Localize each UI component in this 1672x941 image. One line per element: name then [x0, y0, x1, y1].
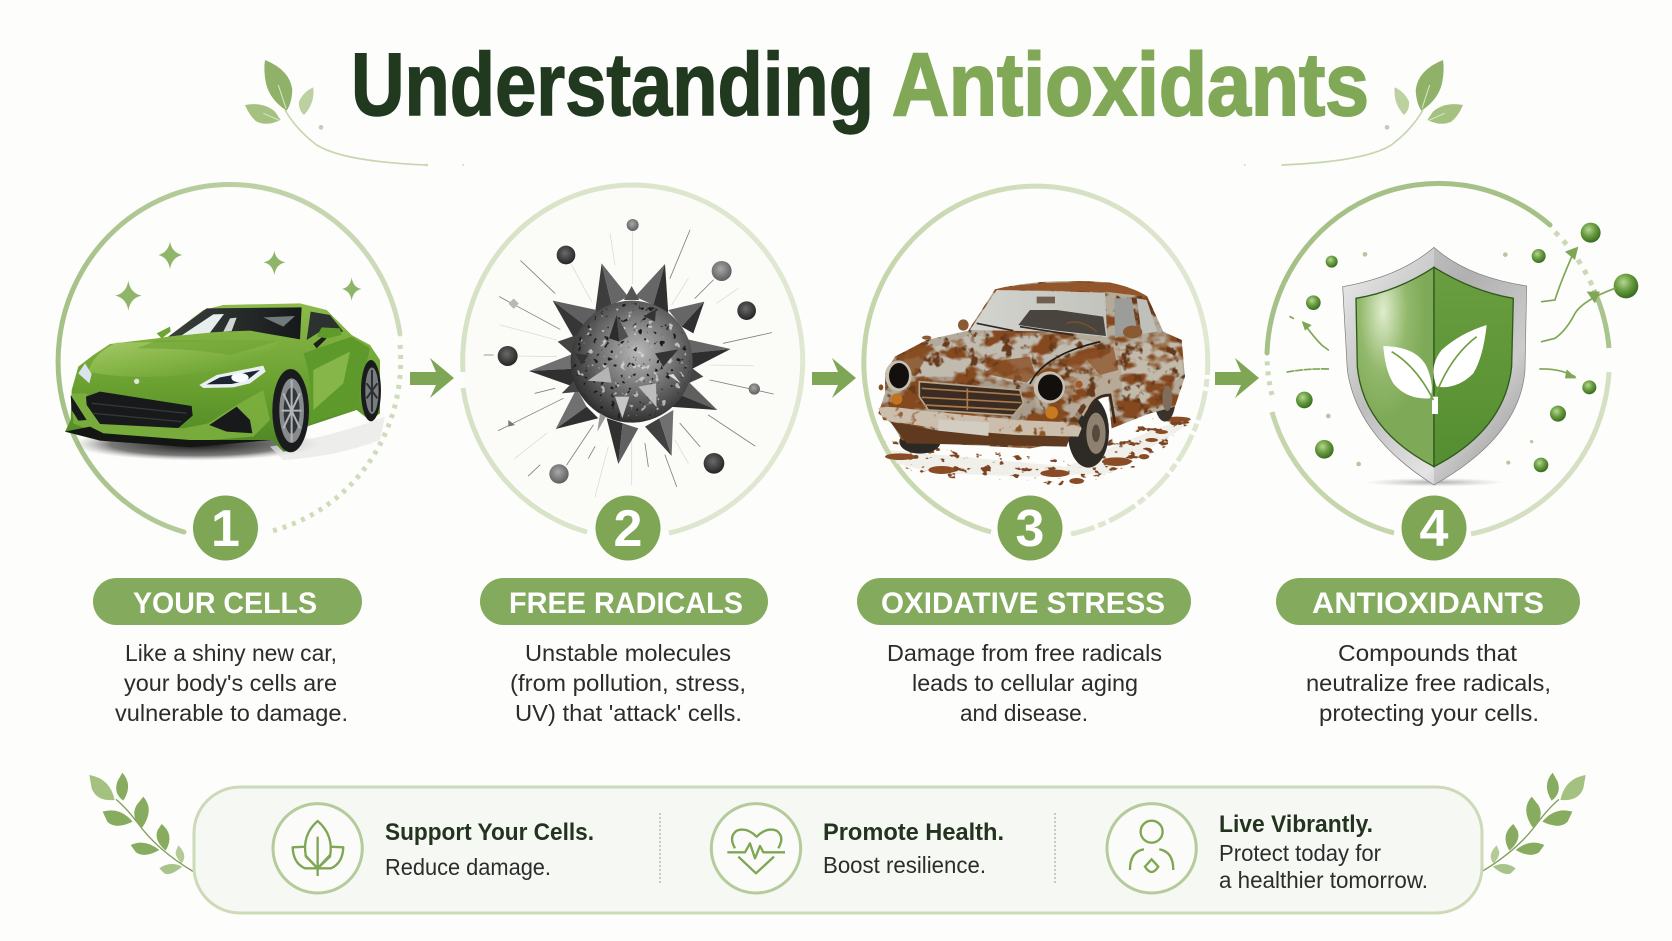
number badge 2 — [596, 496, 660, 560]
text: oxidative stress description: leads to cellular aging — [912, 670, 1138, 696]
panel: benefits — [194, 787, 1482, 913]
ring: step 1 — [58, 184, 401, 532]
roof rust — [995, 282, 1147, 297]
shield frame — [1343, 247, 1527, 485]
label: antioxidants — [1276, 578, 1580, 625]
icon: sparkles — [115, 242, 362, 311]
icon: person — [1107, 804, 1196, 893]
grille and inlets — [71, 392, 252, 433]
number badge 4 — [1402, 496, 1466, 560]
text: antioxidants description — [1306, 640, 1551, 726]
wheels — [272, 360, 381, 452]
deflection arrows — [1286, 249, 1615, 377]
wheel rim — [1086, 386, 1172, 454]
illustration: shiny green car — [65, 303, 385, 461]
text: live vibrantly: Protect today for — [1219, 840, 1381, 866]
text: support your cells — [385, 819, 594, 880]
illustration: shield — [1286, 223, 1638, 487]
leaf emblem — [1383, 325, 1487, 414]
icon: left laurel — [89, 773, 194, 874]
text: free radicals description — [510, 640, 746, 726]
label: oxidative stress — [857, 578, 1191, 625]
text: your cells description: Like a shiny new car, — [125, 640, 337, 666]
icon: right title leaves — [1244, 60, 1463, 166]
rust mottling — [878, 281, 1185, 448]
outer spikes — [529, 263, 731, 464]
text: promote health: Boost resilience. — [823, 852, 986, 878]
text: oxidative stress description: Damage from free radicals — [887, 640, 1162, 666]
ring: step 2 — [463, 182, 803, 534]
text: live vibrantly: Live Vibrantly. — [1219, 811, 1373, 838]
label: your cells: YOUR CELLS — [133, 587, 317, 620]
surface texture — [573, 303, 690, 420]
text: support your cells: Support Your Cells. — [385, 819, 594, 846]
text: promote health — [823, 819, 1004, 878]
surface spikes — [575, 309, 681, 432]
title: Understanding — [351, 34, 874, 134]
body shell — [878, 281, 1185, 448]
bumper — [878, 407, 1082, 447]
text: live vibrantly — [1219, 811, 1428, 893]
text: live vibrantly: a healthier tomorrow. — [1219, 867, 1428, 893]
text: antioxidants description: protecting your cells. — [1319, 700, 1539, 726]
icon: left title leaves — [245, 60, 464, 166]
illustration: rusty car — [878, 281, 1195, 487]
mirrors — [922, 319, 1142, 340]
title: Antioxidants — [892, 34, 1369, 134]
label: free radicals — [480, 578, 768, 625]
body shading — [890, 332, 1183, 437]
label: oxidative stress: OXIDATIVE STRESS — [881, 587, 1165, 620]
icon: leaf — [273, 804, 362, 893]
number badge 4: 4 — [1420, 500, 1449, 558]
text: your cells description: vulnerable to damage. — [115, 700, 348, 726]
number badge 2: 2 — [614, 500, 642, 558]
satellite radicals — [498, 219, 760, 484]
arrow 2 — [812, 358, 856, 398]
shield face — [1356, 267, 1434, 467]
windows — [168, 307, 343, 340]
number badge 3: 3 — [1016, 500, 1044, 558]
text: support your cells: Reduce damage. — [385, 854, 551, 880]
tires — [899, 375, 1176, 468]
text: your cells description — [115, 640, 348, 726]
text: free radicals description: Unstable molecules — [525, 640, 731, 666]
number badge 1: 1 — [211, 500, 240, 558]
ring: step 4 — [1267, 183, 1609, 534]
text: antioxidants description: Compounds that — [1338, 640, 1518, 666]
text: antioxidants description: neutralize free radicals, — [1306, 670, 1551, 696]
number badge 1 — [193, 496, 258, 560]
text: oxidative stress description — [887, 640, 1162, 726]
text: free radicals description: UV) that 'attack' cells. — [515, 700, 742, 726]
headlights — [78, 363, 266, 388]
text: your cells description: your body's cells are — [124, 670, 337, 696]
number badge 3 — [998, 496, 1062, 560]
icon: heart — [711, 804, 801, 893]
illustration: free radical — [484, 219, 773, 497]
text: free radicals description: (from pollution, stress, — [510, 670, 746, 696]
icon: right laurel — [1481, 773, 1586, 874]
ring: step 3 — [864, 186, 1208, 534]
label: your cells — [93, 578, 362, 625]
title — [351, 34, 1369, 134]
motion streaks — [484, 230, 773, 497]
headlights — [885, 360, 1065, 419]
label: antioxidants: ANTIOXIDANTS — [1312, 587, 1544, 620]
glass — [970, 290, 1157, 338]
label: free radicals: FREE RADICALS — [509, 587, 743, 620]
arrow 3 — [1215, 358, 1259, 398]
debris and ground — [879, 384, 1195, 487]
antioxidant molecules — [1296, 223, 1638, 472]
text: oxidative stress description: and disease. — [960, 700, 1088, 726]
grille — [919, 382, 1023, 415]
text: promote health: Promote Health. — [823, 819, 1004, 846]
arrow 1 — [410, 358, 454, 398]
